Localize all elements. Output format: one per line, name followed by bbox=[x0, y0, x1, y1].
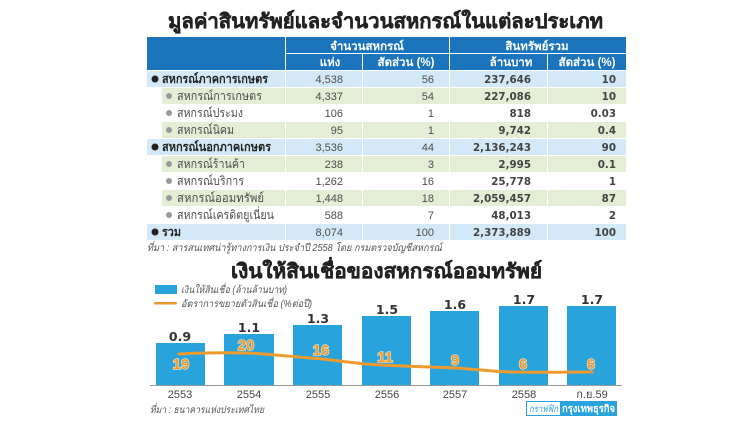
row: shops: สหกรณ์ร้านค้า bbox=[177, 157, 245, 171]
row: fisheries bbox=[166, 106, 616, 120]
bar values: 1.7 bbox=[513, 292, 535, 307]
row: savings: สหกรณ์ออมทรัพย์ bbox=[177, 191, 264, 205]
row: agriculture: 54 bbox=[422, 91, 434, 103]
bar values: 1.3 bbox=[307, 311, 329, 326]
row: total: 8,074 bbox=[315, 227, 343, 239]
row: services: สหกรณ์บริการ bbox=[177, 174, 244, 188]
row: savings: 2,059,457 bbox=[473, 193, 531, 205]
row: fisheries: 1 bbox=[428, 108, 434, 120]
row: shops: 3 bbox=[428, 159, 434, 171]
row: fisheries: 106 bbox=[325, 108, 343, 120]
year axis labels: 2557 bbox=[443, 389, 467, 401]
row: fisheries: 0.03 bbox=[591, 108, 616, 120]
growth rate labels: 20 bbox=[238, 337, 254, 354]
row: services: 16 bbox=[422, 176, 434, 188]
row: non-agricultural sector: 2,136,243 bbox=[473, 142, 531, 154]
row: shops: 0.1 bbox=[598, 159, 616, 171]
growth rate labels: 6 bbox=[519, 356, 527, 373]
bar values bbox=[169, 292, 603, 344]
year axis labels: 2554 bbox=[237, 389, 261, 401]
table header: สัดส่วน (%) bbox=[378, 56, 435, 69]
row backgrounds bbox=[147, 71, 626, 240]
graphic credit badge bbox=[526, 401, 617, 416]
row: agricultural sector: 56 bbox=[422, 74, 434, 86]
row: non-agricultural sector: 44 bbox=[422, 142, 434, 154]
row: services: 25,778 bbox=[491, 176, 531, 188]
year axis labels: ก.ย.59 bbox=[576, 389, 608, 401]
growth rate labels: 9 bbox=[451, 352, 459, 369]
row: agricultural sector: 10 bbox=[602, 74, 616, 86]
row: non-agricultural sector: 3,536 bbox=[315, 142, 343, 154]
row: settlement: 1 bbox=[428, 125, 434, 137]
bar values: 1.7 bbox=[581, 292, 603, 307]
row: agriculture: 227,086 bbox=[484, 91, 531, 103]
table header: ล้านบาท bbox=[490, 56, 533, 69]
table source note: ที่มา : สารสนเทศน่ารู้ทางการเงิน ประจำปี 2558 โดย กรมตรวจบัญชีสหกรณ์ bbox=[147, 240, 444, 254]
row: agriculture: 10 bbox=[602, 91, 616, 103]
growth rate labels: 6 bbox=[587, 356, 595, 373]
row: total: รวม bbox=[162, 225, 181, 239]
row: agricultural sector: 4,538 bbox=[315, 74, 343, 86]
row: credit union: 7 bbox=[428, 210, 434, 222]
row: agriculture bbox=[166, 89, 616, 103]
baseline bbox=[150, 385, 622, 386]
row: shops: 238 bbox=[325, 159, 343, 171]
row: non-agricultural sector: 90 bbox=[602, 142, 616, 154]
table header bbox=[147, 37, 626, 70]
row: non-agricultural sector: สหกรณ์นอกภาคเกษตร bbox=[162, 140, 272, 154]
graphic credit badge: กรุงเทพธุรกิจ bbox=[562, 403, 615, 415]
row: settlement: สหกรณ์นิคม bbox=[177, 123, 234, 137]
row: savings: 1,448 bbox=[315, 193, 343, 205]
row: services: 1,262 bbox=[315, 176, 343, 188]
title: มูลค่าสินทรัพย์และจำนวนสหกรณ์ในแต่ละประเภท bbox=[168, 9, 603, 35]
row: total bbox=[152, 225, 616, 239]
row: credit union bbox=[166, 206, 616, 223]
bar values: 1.5 bbox=[376, 302, 398, 317]
growth rate labels bbox=[173, 337, 595, 373]
row: settlement: 0.4 bbox=[598, 125, 616, 137]
row: credit union: 2 bbox=[609, 210, 616, 222]
panel: cooperative table bbox=[147, 37, 626, 240]
growth rate line bbox=[179, 353, 592, 372]
row: credit union: สหกรณ์เครดิตยูเนี่ยน bbox=[177, 206, 274, 223]
chart legend bbox=[154, 282, 312, 310]
row: total: 100 bbox=[416, 227, 434, 239]
row: total: 2,373,889 bbox=[473, 227, 531, 239]
chart title: เงินให้สินเชื่อของสหกรณ์ออมทรัพย์ bbox=[231, 256, 542, 283]
graphic credit badge: กราฟฟิก bbox=[529, 404, 559, 415]
row: savings: 18 bbox=[422, 193, 434, 205]
table header: สัดส่วน (%) bbox=[559, 56, 616, 69]
row: shops bbox=[166, 157, 616, 171]
row: credit union: 588 bbox=[325, 210, 343, 222]
row: services bbox=[166, 174, 616, 188]
growth rate labels: 11 bbox=[377, 349, 393, 366]
row: agricultural sector: สหกรณ์ภาคการเกษตร bbox=[162, 72, 269, 86]
row: settlement: 9,742 bbox=[498, 125, 531, 137]
row: agriculture: สหกรณ์การเกษตร bbox=[177, 89, 262, 103]
bar values: 1.1 bbox=[238, 320, 260, 335]
row: savings: 87 bbox=[602, 193, 616, 205]
row: agricultural sector bbox=[152, 72, 616, 86]
chart legend: เงินให้สินเชื่อ (ล้านล้านบาท) bbox=[181, 282, 287, 296]
row: settlement bbox=[166, 123, 616, 137]
growth rate labels: 16 bbox=[313, 342, 329, 359]
year axis labels bbox=[168, 389, 608, 401]
year axis labels: 2556 bbox=[375, 389, 399, 401]
row: agriculture: 4,337 bbox=[315, 91, 343, 103]
table header: สินทรัพย์รวม bbox=[505, 39, 569, 53]
bar and line chart bbox=[150, 292, 622, 401]
year axis labels: 2555 bbox=[306, 389, 330, 401]
year axis labels: 2553 bbox=[168, 389, 192, 401]
row: services: 1 bbox=[609, 176, 616, 188]
row: total: 100 bbox=[594, 227, 616, 239]
bars bbox=[156, 306, 616, 385]
row: credit union: 48,013 bbox=[491, 210, 531, 222]
row: settlement: 95 bbox=[331, 125, 343, 137]
bar values: 1.6 bbox=[444, 297, 466, 312]
chart source note: ที่มา : ธนาคารแห่งประเทศไทย bbox=[150, 402, 265, 416]
table header: จำนวนสหกรณ์ bbox=[330, 39, 404, 53]
chart legend: อัตราการขยายตัวสินเชื่อ (%ต่อปี) bbox=[181, 296, 312, 310]
growth rate labels: 19 bbox=[173, 356, 189, 373]
row: shops: 2,995 bbox=[498, 159, 531, 171]
row: non-agricultural sector bbox=[152, 140, 616, 154]
bar values: 0.9 bbox=[169, 329, 191, 344]
year axis labels: 2558 bbox=[512, 389, 536, 401]
row: savings bbox=[166, 191, 616, 205]
table header: แห่ง bbox=[320, 56, 341, 69]
row: fisheries: สหกรณ์ประมง bbox=[177, 106, 243, 120]
row: fisheries: 818 bbox=[510, 108, 531, 120]
row: agricultural sector: 237,646 bbox=[484, 74, 531, 86]
